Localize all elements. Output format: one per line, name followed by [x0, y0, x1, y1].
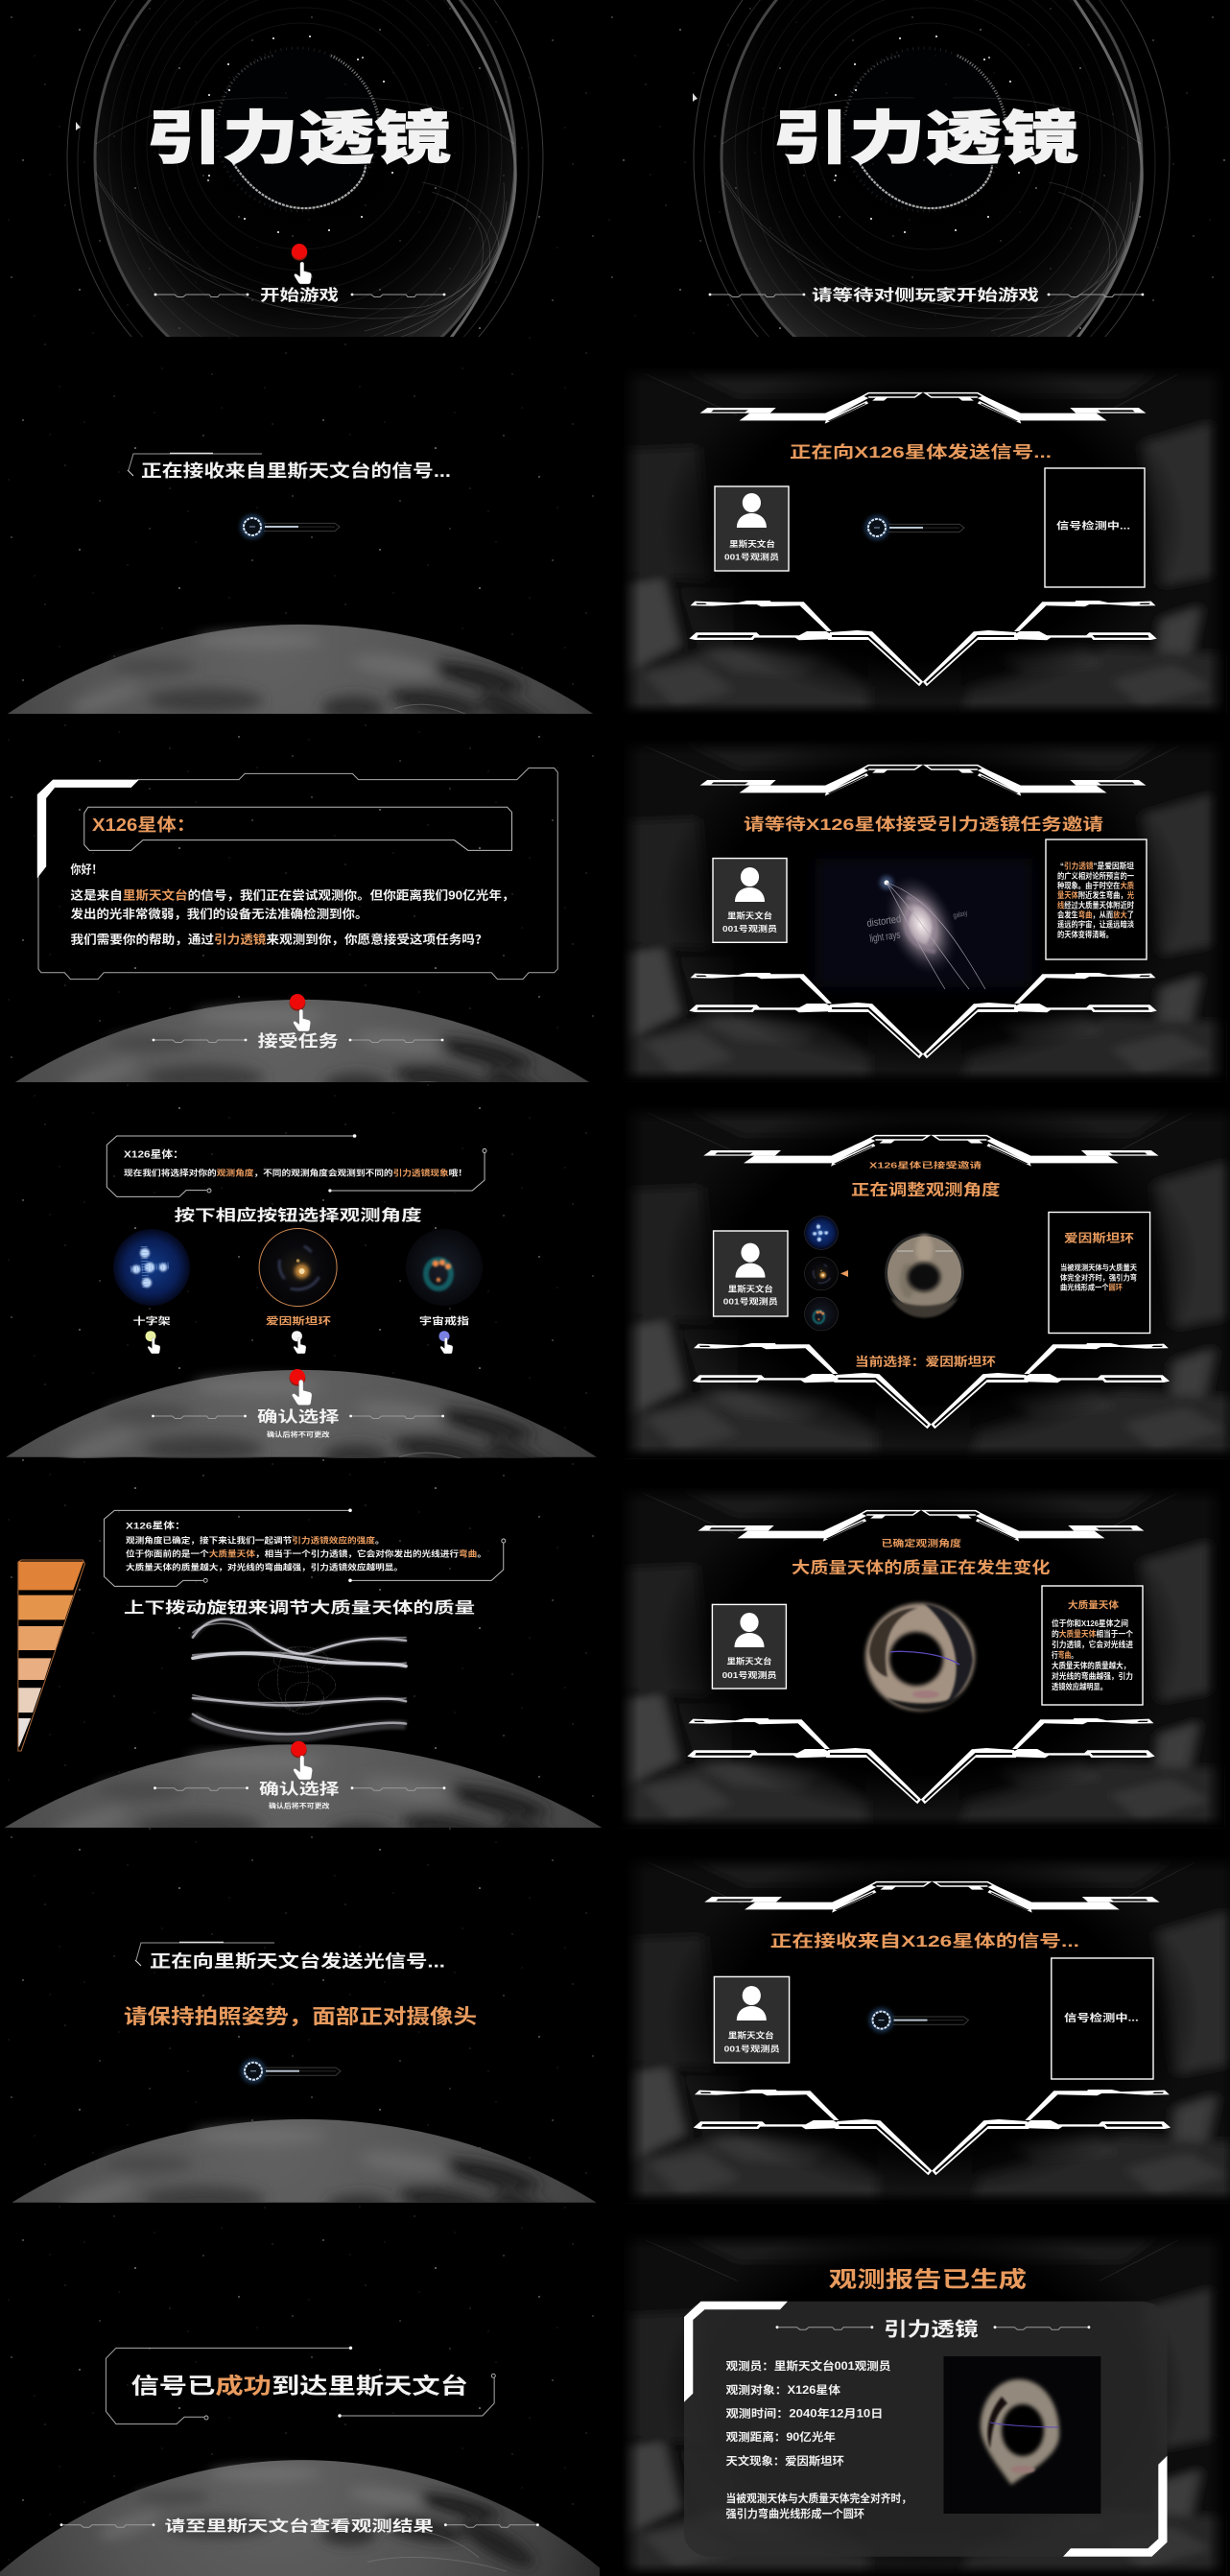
heading bracket — [135, 1942, 274, 1966]
box: massive body explanation: 行弯曲。 — [1052, 1650, 1077, 1660]
report fields — [725, 2359, 911, 2520]
panel: sending light signal back — [12, 1942, 597, 2203]
card: observer: 001号观测员 — [722, 924, 778, 934]
card: observer: 里斯天文台 — [728, 2030, 774, 2040]
callout frame — [104, 1510, 504, 1586]
moon — [0, 2460, 609, 2576]
report fields: 强引力弯曲光线形成一个圆环 — [725, 2507, 864, 2520]
text: waiting for the other player: 请等待对侧玩家开始游戏 — [812, 286, 1039, 304]
message body: 我们需要你的帮助，通过 引力透镜 来观测到你，你愿意接受这项任务吗？ — [71, 933, 487, 946]
card: observer: 里斯天文台 — [728, 1284, 773, 1293]
illustration: galaxy bending light — [816, 859, 1032, 989]
card: observer: 里斯天文台 — [727, 911, 772, 921]
callout title: X126星体： — [124, 1147, 184, 1161]
box: Einstein ring explanation — [1049, 1213, 1150, 1334]
box: gravitational lens explanation: 会发生弯曲，从而放大了 — [1057, 910, 1134, 919]
report fields: 观测对象：X126星体 — [725, 2383, 841, 2397]
current selection: 当前选择：爱因斯坦环 — [855, 1355, 997, 1368]
panel: receiving signal from observatory — [8, 453, 593, 714]
sub heading: X126星体已接受邀请 — [869, 1161, 982, 1170]
callout end markers — [203, 1508, 506, 1582]
cockpit background — [620, 1487, 1224, 1828]
card: observer — [713, 859, 787, 942]
graphic: gravitational lens rings — [67, 0, 543, 337]
cockpit background — [622, 740, 1226, 1082]
cockpit background — [624, 1106, 1230, 1458]
box: massive body explanation: 大质量天体的质量越大， — [1052, 1661, 1130, 1670]
box: massive body explanation: 大质量天体 — [1068, 1598, 1119, 1612]
message body — [71, 862, 514, 946]
HUD frame — [694, 1882, 1171, 2175]
report fields: 观测时间：2040年12月10日 — [725, 2407, 883, 2421]
sub heading: 已确定观测角度 — [881, 1538, 962, 1549]
panel: choose observation angle — [6, 1134, 597, 1458]
box: Einstein ring explanation: 体完全对齐时，强引力弯 — [1060, 1272, 1137, 1282]
option: cross: 十字架 — [133, 1314, 171, 1328]
report card — [684, 2302, 1167, 2557]
angle thumbnails — [804, 1217, 839, 1331]
lensed face photo — [944, 2356, 1100, 2514]
callout body: 现在我们将选择对你的 观测角度 ，不同的观测角度会观测到不同的 引力透镜现象 哦！ — [124, 1169, 467, 1178]
card: observer: 001号观测员 — [724, 2044, 780, 2053]
heading: 上下拨动旋钮来调节大质量天体的质量 — [124, 1598, 475, 1617]
divider left — [709, 294, 805, 297]
divider left — [153, 1039, 247, 1042]
box: gravitational lens explanation: 的天体变得清晰。 — [1057, 930, 1113, 939]
box: gravitational lens explanation: 线经过大质量天体附近时 — [1057, 900, 1135, 910]
panel: observation report — [622, 2233, 1226, 2576]
callout body: 观测角度已确定，接下来让我们一起调节 引力透镜效应的强度 。 — [126, 1535, 385, 1545]
panel: start screen, player A — [67, 0, 543, 337]
icon: cursor arrow — [76, 122, 81, 130]
option: Einstein ring, selected — [259, 1228, 338, 1354]
box: gravitational lens explanation: 种现象。由于时空在大质 — [1057, 881, 1134, 890]
heading: 按下相应按钮选择观测角度 — [175, 1206, 422, 1224]
heading: 正在调整观测角度 — [851, 1180, 1000, 1199]
heading: 信号已 成功 到达里斯天文台 — [130, 2374, 468, 2399]
moon — [12, 2118, 597, 2203]
illustration: mass waves — [193, 1615, 406, 1744]
box: gravitational lens explanation — [1046, 839, 1147, 959]
box: Einstein ring explanation: 曲光线形成一个圆环 — [1060, 1282, 1123, 1291]
panel: adjust mass — [4, 1508, 603, 1828]
divider right — [444, 2523, 539, 2527]
divider right — [351, 1786, 445, 1790]
loader — [869, 2008, 969, 2033]
HUD frame — [687, 1511, 1155, 1804]
icon: cursor arrow — [693, 93, 698, 102]
HUD frame — [693, 1136, 1170, 1429]
lensed face — [887, 1235, 963, 1318]
illustration: galaxy bending light: light rays — [869, 930, 901, 945]
illustration: galaxy bending light: distorted — [866, 913, 902, 930]
box: gravitational lens explanation: “引力透镜”是爱因斯坦 — [1060, 862, 1135, 871]
box: massive body explanation: 对光线的弯曲越强，引力 — [1052, 1671, 1133, 1681]
title: 引力透镜 — [772, 106, 1078, 171]
box: signal detecting: 信号检测中... — [1064, 2011, 1139, 2024]
box: gravitational lens explanation: 遥远的宇宙，让遥远暗淡 — [1057, 919, 1135, 929]
card: observer: 001号观测员 — [723, 1297, 778, 1307]
illustration: galaxy bending light: galaxy — [953, 909, 968, 920]
panel: adjusting observation angle — [624, 1106, 1230, 1458]
heading: 正在向里斯天文台发送光信号... — [150, 1951, 445, 1971]
outer message frame — [37, 768, 557, 980]
divider right — [349, 1039, 443, 1042]
box: massive body explanation — [1042, 1586, 1143, 1705]
panel: signal arrived — [0, 2347, 609, 2576]
divider left — [154, 294, 248, 297]
report fields: 观测员：里斯天文台001观测员 — [725, 2359, 890, 2373]
card title divider left — [776, 2326, 873, 2329]
callout body: 大质量天体的质量越大，对光线的弯曲越强，引力透镜效应越明显。 — [126, 1562, 403, 1572]
card: observer: 里斯天文台 — [727, 1656, 771, 1666]
box: gravitational lens explanation: 量天体附近发生弯曲，光 — [1057, 890, 1135, 900]
divider left — [152, 1415, 247, 1418]
panel: invitation from observatory — [15, 768, 589, 1082]
card: observer — [714, 1231, 788, 1316]
moon — [4, 1744, 603, 1828]
icon: pointing hand — [295, 262, 312, 284]
box: signal detecting: 信号检测中... — [1056, 520, 1130, 532]
HUD frame — [689, 766, 1157, 1058]
lensed face with dark center — [865, 1603, 975, 1711]
panel: sending signal to X126 — [622, 367, 1226, 715]
text: confirm selection: 确认选择 — [259, 1781, 340, 1798]
text: accept mission: 接受任务 — [258, 1032, 339, 1051]
cockpit background — [626, 1856, 1230, 2203]
heading: 请等待X126星体接受引力透镜任务邀请 — [744, 815, 1103, 834]
button: red start — [292, 244, 307, 261]
message body: 发出的光非常微弱，我们的设备无法准确检测到你。 — [71, 907, 368, 921]
card: observer: 001号观测员 — [724, 553, 780, 562]
heading: 正在接收来自里斯天文台的信号... — [141, 461, 451, 481]
cockpit background — [622, 2233, 1226, 2576]
heading: 正在向X126星体发送信号... — [790, 442, 1052, 461]
panel: start screen, player B — [693, 0, 1171, 337]
icon: pointing hand — [294, 1009, 311, 1031]
callout end markers — [207, 1134, 486, 1193]
button: red accept — [290, 994, 305, 1011]
card: observer — [712, 1604, 786, 1689]
instruction: 请保持拍照姿势，面部正对摄像头 — [124, 2006, 477, 2028]
callout body: 位于你面前的是一个 大质量天体 ，相当于一个引力透镜，它会对你发出的光线进行 弯曲 。 — [126, 1548, 486, 1558]
graphic: gravitational lens rings — [693, 0, 1171, 337]
box: massive body explanation: 透镜效应越明显。 — [1052, 1682, 1107, 1691]
loader — [240, 514, 340, 539]
report fields: 天文现象：爱因斯坦环 — [725, 2454, 844, 2468]
option: cosmic ring: 宇宙戒指 — [419, 1314, 469, 1328]
text: view results: 请至里斯天文台查看观测结果 — [165, 2517, 435, 2535]
moon — [15, 1000, 589, 1082]
box: signal detecting — [1045, 468, 1145, 587]
gauge: mass level — [18, 1560, 84, 1751]
divider right — [351, 294, 445, 297]
card title: 引力透镜 — [884, 2318, 979, 2341]
loader — [241, 2059, 341, 2084]
heading: 大质量天体的质量正在发生变化 — [792, 1558, 1051, 1577]
box: Einstein ring explanation: 当被观测天体与大质量天 — [1060, 1263, 1137, 1272]
box: massive body explanation: 位于你和X126星体之间 — [1052, 1619, 1128, 1628]
option: cosmic ring — [406, 1229, 483, 1354]
corner accent, top left — [684, 2302, 788, 2402]
panel: mass is changing — [620, 1487, 1224, 1828]
panel: waiting for X126 to accept — [622, 740, 1226, 1082]
divider left — [60, 2523, 154, 2527]
message body: 你好！ — [71, 862, 102, 877]
title: 引力透镜 — [146, 106, 451, 171]
box: Einstein ring explanation: 爱因斯坦环 — [1064, 1230, 1134, 1245]
text: note: 确认后将不可更改 — [267, 1430, 330, 1439]
message frame — [106, 2348, 494, 2424]
heading bracket — [128, 453, 262, 476]
callout frame — [106, 1136, 485, 1196]
box: gravitational lens explanation: 的广义相对论所预言的一 — [1057, 871, 1134, 881]
icon: pointing hand — [294, 1756, 313, 1780]
option: Einstein ring, selected: 爱因斯坦环 — [266, 1314, 331, 1328]
button: red confirm — [290, 1369, 305, 1386]
divider right — [1048, 294, 1144, 297]
moon — [6, 1370, 597, 1458]
callout body — [126, 1535, 486, 1572]
panel: receiving signal from X126 — [626, 1856, 1230, 2203]
divider right — [349, 1415, 444, 1418]
card title divider right — [994, 2326, 1090, 2329]
box: massive body explanation: 的大质量天体相当于一个 — [1052, 1629, 1134, 1639]
frame end markers — [204, 2347, 495, 2420]
card: observer: 001号观测员 — [722, 1670, 777, 1680]
box: massive body explanation: 引力透镜，它会对光线进 — [1052, 1640, 1134, 1649]
option: cross — [113, 1229, 190, 1354]
moon — [8, 624, 593, 714]
heading: 观测报告已生成 — [829, 2266, 1027, 2291]
icon: selection arrow — [840, 1270, 848, 1277]
cockpit background — [622, 367, 1226, 715]
HUD frame — [689, 393, 1157, 686]
message title: X126星体： — [92, 815, 196, 835]
icon: pointing hand — [292, 1380, 312, 1406]
report fields: 观测距离：90亿光年 — [725, 2430, 837, 2444]
button: red confirm — [291, 1741, 307, 1758]
card: observer: 里斯天文台 — [729, 539, 775, 549]
callout title: X126星体： — [126, 1520, 186, 1531]
heading: 正在接收来自X126星体的信号... — [770, 1931, 1079, 1950]
text: confirm selection: 确认选择 — [257, 1408, 340, 1426]
corner accent, bottom right — [1063, 2456, 1167, 2557]
text: note: 确认后将不可更改 — [269, 1802, 330, 1809]
box: signal detecting — [1052, 1958, 1153, 2079]
divider left — [154, 1786, 248, 1790]
loader — [864, 515, 964, 540]
text: start game: 开始游戏 — [260, 286, 339, 304]
card: observer — [715, 486, 789, 571]
message body: 这是来自 里斯天文台 的信号，我们正在尝试观测你。但你距离我们90亿光年， — [71, 888, 514, 902]
report fields: 当被观测天体与大质量天体完全对齐时， — [725, 2492, 911, 2505]
card: observer — [714, 1976, 790, 2063]
